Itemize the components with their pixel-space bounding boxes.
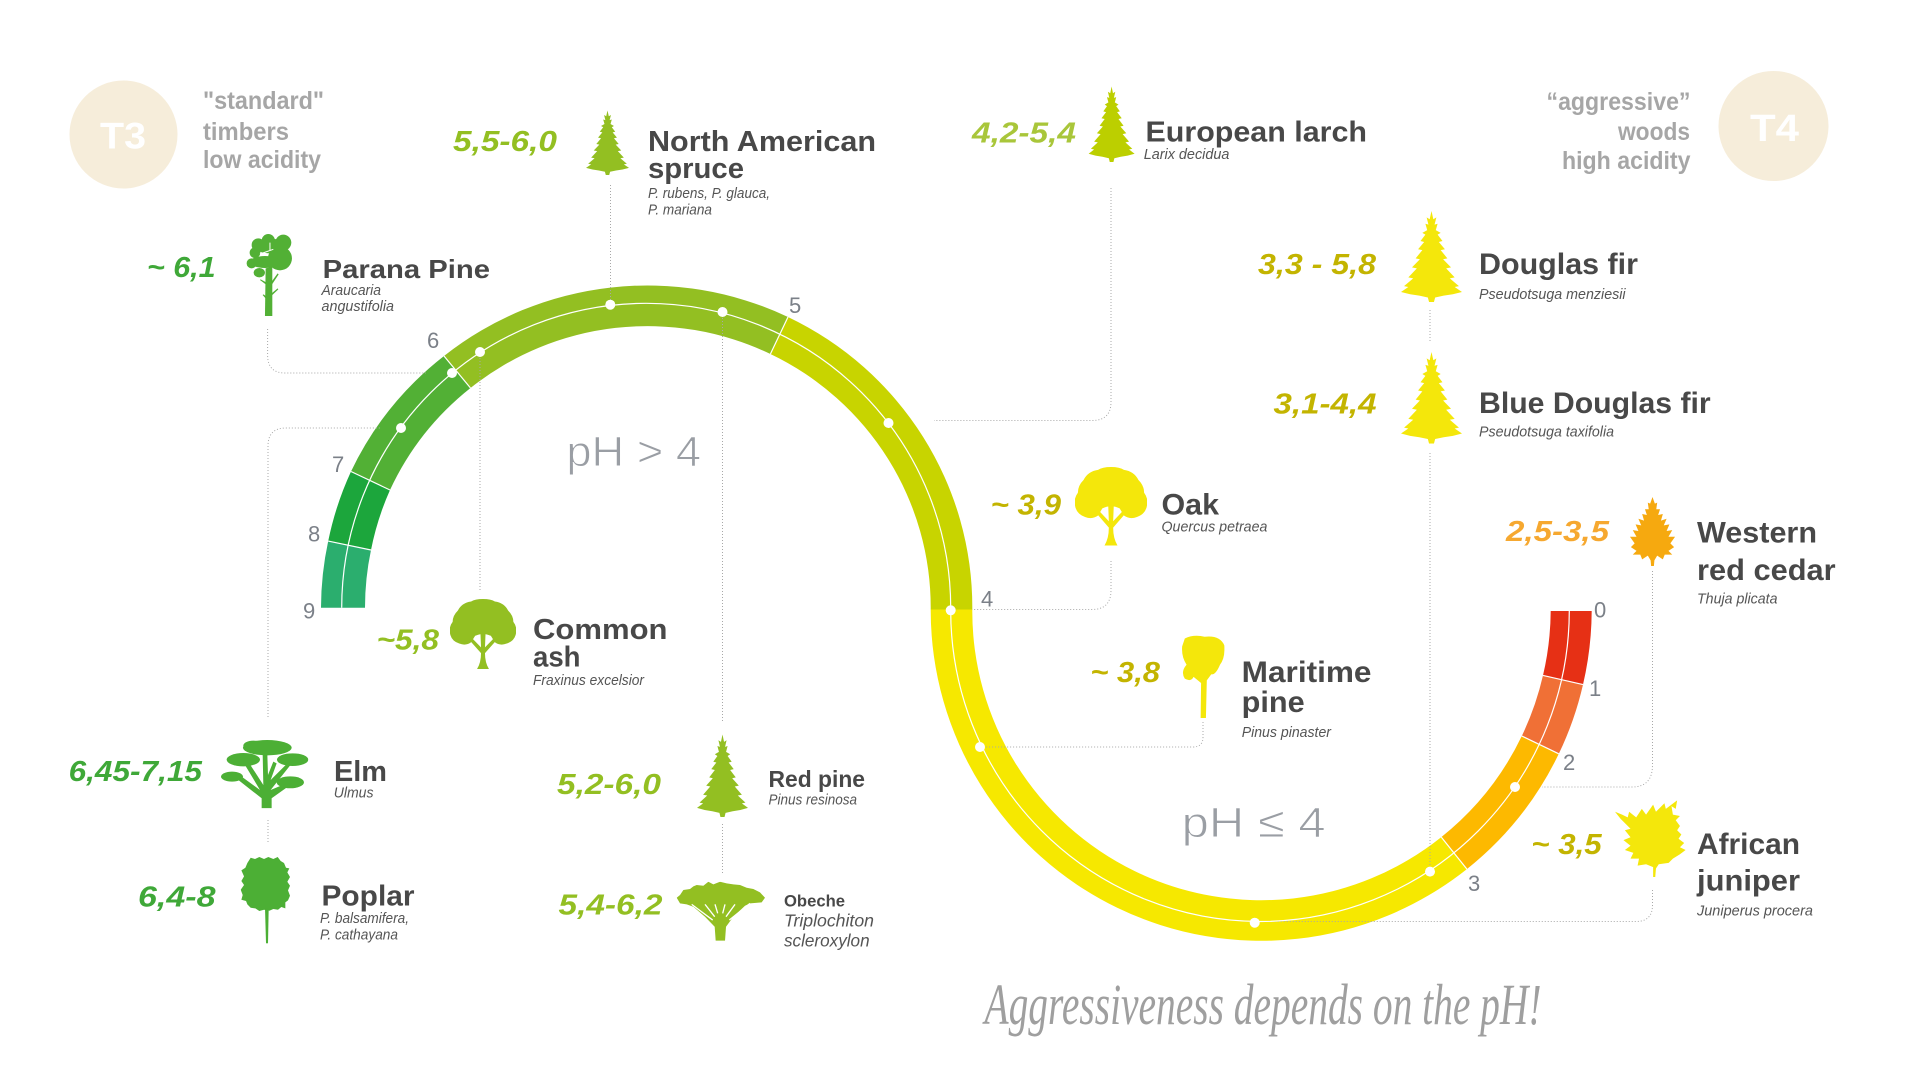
text: standard timbers low acidity: low acidity bbox=[203, 146, 321, 174]
entry: Poplar bbox=[138, 857, 414, 944]
entry: North American spruce: 5,5-6,0 bbox=[453, 126, 557, 158]
entry: Obeche: 5,4-6,2 bbox=[558, 890, 662, 922]
entry: North American spruce: P. mariana bbox=[648, 203, 712, 219]
arc scale: pH 4 to 0 bbox=[931, 610, 1592, 941]
badge: T4 aggressive woods: T4 bbox=[1750, 108, 1799, 150]
entry: Blue Douglas fir: Pseudotsuga taxifolia bbox=[1479, 425, 1614, 441]
markers: white dots on the arcs bbox=[396, 300, 1520, 928]
entry: Maritime pine bbox=[1090, 636, 1372, 741]
text: aggressive woods high acidity bbox=[1546, 88, 1691, 175]
entry: African juniper: ~ 3,5 bbox=[1531, 829, 1603, 861]
entry: African juniper: juniper bbox=[1696, 864, 1800, 898]
entry: Elm: Ulmus bbox=[334, 786, 374, 802]
entry: Red pine: Pinus resinosa bbox=[768, 792, 857, 808]
entry: Common ash: ~5,8 bbox=[377, 624, 440, 656]
text: standard timbers low acidity: "standard" bbox=[203, 87, 324, 115]
pH scale numbers: 2 bbox=[1563, 750, 1575, 775]
entry: Western red cedar: 2,5-3,5 bbox=[1505, 516, 1610, 548]
entry: Obeche: Triplochiton bbox=[784, 910, 874, 930]
pH scale numbers: 4 bbox=[981, 586, 993, 612]
entry: Maritime pine: pine bbox=[1242, 686, 1305, 719]
pH scale numbers: 6 bbox=[427, 328, 439, 353]
entry: Parana Pine: angustifolia bbox=[322, 299, 394, 315]
entry: Parana Pine: Parana Pine bbox=[323, 254, 490, 284]
entry: Blue Douglas fir: 3,1-4,4 bbox=[1274, 389, 1376, 421]
arc scale: pH 9 to 4 bbox=[321, 285, 972, 610]
entry: Elm: Elm bbox=[334, 756, 387, 788]
entry: Western red cedar: Thuja plicata bbox=[1697, 592, 1778, 608]
label: pH above 4: pH > 4 bbox=[566, 428, 701, 476]
pH scale numbers: 5 bbox=[789, 293, 801, 318]
pH scale numbers: 8 bbox=[308, 522, 320, 547]
entry: Douglas fir: Douglas fir bbox=[1479, 248, 1638, 281]
badge: T3 standard timbers: T3 bbox=[100, 116, 146, 156]
entry: Obeche bbox=[558, 882, 874, 950]
entry: Oak: Quercus petraea bbox=[1162, 519, 1267, 535]
entry: Maritime pine: ~ 3,8 bbox=[1090, 657, 1161, 689]
entry: North American spruce: North American bbox=[648, 126, 876, 158]
entry: Common ash: ash bbox=[533, 641, 580, 673]
tagline: handwritten conclusion: Aggressiveness depends on the pH! bbox=[982, 972, 1542, 1037]
entry: Obeche: Obeche bbox=[784, 892, 845, 911]
entry: Common ash: Common bbox=[533, 614, 668, 646]
entry: European larch bbox=[971, 86, 1367, 163]
entry: North American spruce bbox=[453, 110, 876, 219]
entry: European larch: Larix decidua bbox=[1144, 147, 1229, 163]
pH scale numbers: 9 bbox=[303, 598, 315, 624]
text: standard timbers low acidity: timbers bbox=[203, 118, 289, 146]
entry: North American spruce: P. rubens, P. glauca, bbox=[648, 186, 770, 202]
entry: Poplar: P. cathayana bbox=[320, 928, 398, 944]
entry: Douglas fir: Pseudotsuga menziesii bbox=[1479, 287, 1626, 303]
entry: Common ash: Fraxinus excelsior bbox=[533, 673, 645, 689]
entry: Oak bbox=[991, 467, 1267, 546]
badge: T4 aggressive woods bbox=[1718, 71, 1828, 181]
entry: Douglas fir bbox=[1258, 211, 1638, 303]
text: aggressive woods high acidity: “aggressive” bbox=[1546, 88, 1690, 116]
entry: Parana Pine: ~ 6,1 bbox=[147, 252, 216, 284]
entry: Maritime pine: Pinus pinaster bbox=[1242, 725, 1332, 741]
text: aggressive woods high acidity: woods bbox=[1617, 118, 1690, 146]
text: aggressive woods high acidity: high acidity bbox=[1562, 147, 1691, 175]
entry: African juniper bbox=[1531, 800, 1813, 919]
entry: Maritime pine: Maritime bbox=[1242, 656, 1372, 689]
label: pH at most 4: pH ≤ 4 bbox=[1182, 799, 1326, 847]
entry: African juniper: African bbox=[1697, 828, 1800, 861]
entry: Red pine bbox=[557, 734, 865, 817]
entry: Elm bbox=[69, 740, 387, 808]
entry: North American spruce: spruce bbox=[648, 153, 744, 185]
entry: Western red cedar: red cedar bbox=[1697, 554, 1836, 587]
pH scale numbers: 3 bbox=[1468, 871, 1480, 896]
entry: Western red cedar bbox=[1505, 497, 1836, 608]
entry: Elm: 6,45-7,15 bbox=[69, 756, 203, 788]
pH scale numbers: 0 bbox=[1594, 598, 1606, 622]
entry: European larch: European larch bbox=[1146, 117, 1367, 149]
entry: Red pine: 5,2-6,0 bbox=[557, 769, 661, 801]
entry: Oak: Oak bbox=[1162, 488, 1219, 522]
entry: Parana Pine bbox=[147, 234, 490, 316]
entry: Blue Douglas fir bbox=[1274, 352, 1711, 444]
entry: Poplar: Poplar bbox=[322, 881, 414, 913]
entry: Blue Douglas fir: Blue Douglas fir bbox=[1479, 387, 1711, 420]
text: standard timbers low acidity bbox=[203, 87, 324, 174]
entry: Obeche: scleroxylon bbox=[784, 930, 870, 950]
pH scale numbers: 1 bbox=[1589, 676, 1601, 701]
entry: Red pine: Red pine bbox=[768, 766, 865, 792]
entry: Parana Pine: Araucaria bbox=[321, 283, 381, 299]
pH scale numbers bbox=[303, 293, 1606, 896]
badge: T3 standard timbers bbox=[70, 80, 178, 188]
entry: Oak: ~ 3,9 bbox=[991, 490, 1061, 522]
entry: Poplar: 6,4-8 bbox=[138, 882, 217, 914]
entry: Poplar: P. balsamifera, bbox=[320, 911, 409, 927]
entry: European larch: 4,2-5,4 bbox=[971, 117, 1076, 149]
entry: African juniper: Juniperus procera bbox=[1696, 903, 1813, 919]
entry: Douglas fir: 3,3 - 5,8 bbox=[1258, 249, 1377, 281]
entry: Common ash bbox=[377, 599, 668, 689]
pH scale numbers: 7 bbox=[332, 452, 344, 477]
entry: Western red cedar: Western bbox=[1697, 517, 1817, 550]
